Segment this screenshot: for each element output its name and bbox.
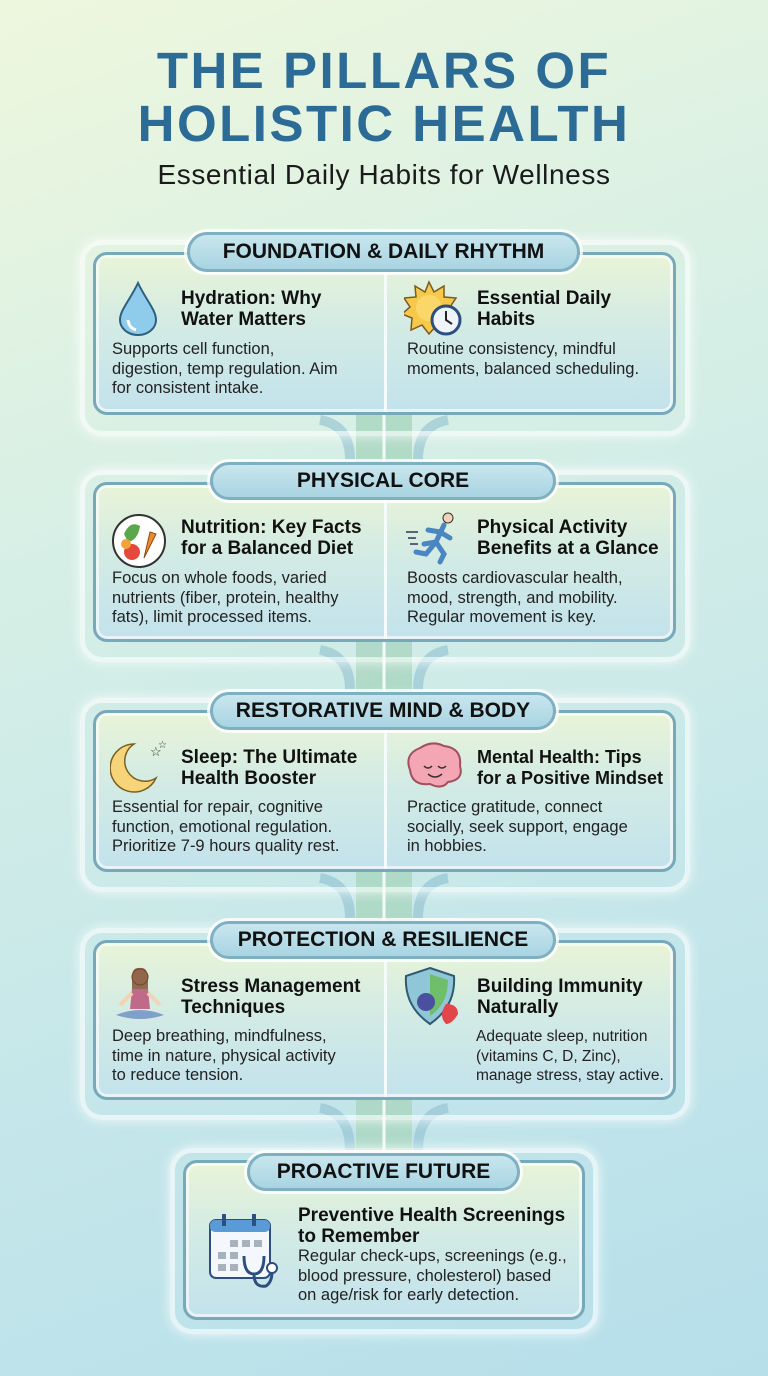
title: THE PILLARS OF: [157, 42, 611, 99]
panel: foundation: Supports cell function,: [112, 340, 274, 358]
heading pill: [210, 921, 556, 959]
icon: brain: [407, 742, 462, 788]
panel: physical core: mood, strength, and mobility.: [407, 588, 618, 606]
panel: restorative: Mental Health: Tips: [477, 747, 642, 767]
icon: shield: [404, 967, 458, 1026]
panel: protection: Techniques: [181, 997, 285, 1018]
panel: foundation: Essential Daily: [477, 288, 611, 309]
panel: restorative: Practice gratitude, connect: [407, 798, 602, 816]
panel: protection: to reduce tension.: [112, 1066, 243, 1084]
panel: physical core: Regular movement is key.: [407, 608, 597, 626]
panel: foundation: [77, 229, 694, 442]
panel: physical core: Boosts cardiovascular health,: [407, 569, 623, 587]
panel: foundation: moments, balanced scheduling.: [407, 360, 639, 378]
icon: water drop: [119, 280, 157, 336]
panel: protection: Deep breathing, mindfulness,: [112, 1027, 327, 1045]
panel: foundation: Habits: [477, 309, 535, 330]
heading pill: RESTORATIVE MIND & BODY: [236, 699, 530, 722]
panel: physical core: for a Balanced Diet: [181, 538, 353, 559]
icon: moon: ☆: [150, 744, 162, 759]
panel: physical core: Focus on whole foods, varied: [112, 569, 327, 587]
panel: foundation: Routine consistency, mindful: [407, 340, 616, 358]
panel: protection: Adequate sleep, nutrition: [476, 1028, 647, 1045]
panel: physical core: Benefits at a Glance: [477, 538, 659, 559]
heading pill: PHYSICAL CORE: [297, 469, 469, 492]
panel: protection: (vitamins C, D, Zinc),: [476, 1048, 621, 1064]
panel: restorative: socially, seek support, engage: [407, 818, 628, 836]
panel: restorative: Health Booster: [181, 768, 316, 789]
panel: physical core: Nutrition: Key Facts: [181, 517, 362, 538]
heading pill: [210, 462, 556, 500]
panel: physical core: [76, 459, 694, 668]
panel: protection: time in nature, physical activity: [112, 1046, 336, 1064]
panel: proactive future: to Remember: [298, 1226, 419, 1247]
icon: runner: [406, 512, 454, 564]
panel: protection: Building Immunity: [477, 976, 643, 997]
panel: foundation: Water Matters: [181, 309, 306, 330]
panel: restorative: for a Positive Mindset: [477, 768, 663, 788]
subtitle: Essential Daily Habits for Wellness: [157, 159, 611, 190]
icon: meditation: [116, 968, 164, 1019]
heading pill: [187, 232, 580, 272]
panel: foundation: Hydration: Why: [181, 288, 321, 309]
heading pill: [210, 692, 556, 730]
panel: protection: manage stress, stay active.: [476, 1067, 664, 1084]
panel: restorative: function, emotional regulation.: [112, 818, 332, 836]
icon: calendar stethoscope: [209, 1214, 278, 1288]
icon: sun clock: [404, 280, 462, 336]
panel: proactive future: Regular check-ups, screenings (e.g.,: [298, 1247, 567, 1265]
panel: restorative: Essential for repair, cognitive: [112, 798, 323, 816]
panel: protection: Naturally: [477, 997, 558, 1018]
panel: proactive future: Preventive Health Screenings: [298, 1205, 565, 1226]
panel: foundation: digestion, temp regulation. Aim: [112, 360, 338, 378]
icon: moon: [110, 740, 167, 793]
heading pill: PROACTIVE FUTURE: [277, 1160, 490, 1183]
icon: nutrition plate: [112, 514, 166, 568]
panel: restorative: Sleep: The Ultimate: [181, 747, 357, 768]
panel: physical core: Physical Activity: [477, 517, 627, 538]
panel: restorative: [76, 689, 695, 899]
title: HOLISTIC HEALTH: [138, 95, 630, 152]
panel: foundation: for consistent intake.: [112, 379, 263, 397]
panel: physical core: fats), limit processed items.: [112, 608, 312, 626]
panel: proactive future: on age/risk for early detection.: [298, 1286, 519, 1304]
panel: physical core: nutrients (fiber, protein, healthy: [112, 588, 339, 606]
panel: restorative: in hobbies.: [407, 837, 487, 855]
panel: protection: Stress Management: [181, 976, 361, 997]
panel: restorative: Prioritize 7-9 hours quality rest.: [112, 837, 339, 855]
title: [138, 42, 630, 152]
heading pill: FOUNDATION & DAILY RHYTHM: [223, 240, 544, 263]
heading pill: PROTECTION & RESILIENCE: [238, 928, 528, 951]
panel: proactive future: blood pressure, cholesterol) based: [298, 1266, 551, 1284]
icon: moon: ☆: [158, 740, 167, 751]
heading pill: [247, 1153, 520, 1191]
